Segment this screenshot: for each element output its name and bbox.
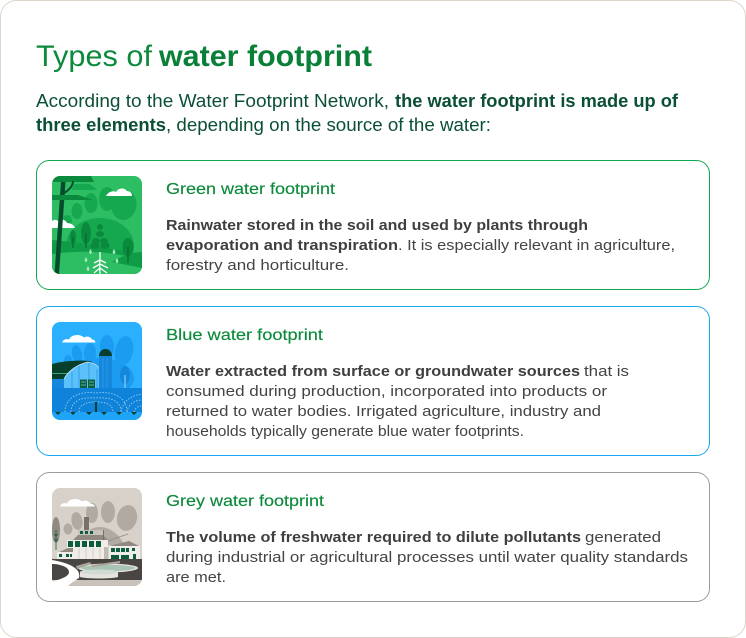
- title: water footprint: [158, 40, 372, 73]
- panel: green water footprint: [36, 160, 710, 290]
- description: . It is especially relevant in agriculture,: [398, 237, 675, 254]
- description: The volume of freshwater required to dilute pollutants: [166, 529, 581, 546]
- icon: barn and irrigation: [52, 322, 142, 420]
- description: households typically generate blue water footprints.: [166, 423, 524, 440]
- description: evaporation and transpiration: [166, 237, 398, 254]
- description: that is: [584, 363, 629, 380]
- description: consumed during production, incorporated into products or: [166, 383, 607, 400]
- intro text: three elements: [36, 115, 166, 135]
- description: during industrial or agricultural processes until water quality standards: [166, 549, 688, 566]
- icon detail: clouds: [106, 188, 132, 196]
- intro text: According to the Water Footprint Network,: [36, 91, 389, 111]
- panel: blue water footprint: [36, 306, 710, 456]
- icon detail: road: [52, 560, 79, 586]
- description: [166, 529, 688, 586]
- description: generated: [585, 529, 661, 546]
- title: Types of: [36, 40, 153, 73]
- description: returned to water bodies. Irrigated agriculture, industry and: [166, 403, 601, 420]
- description: Rainwater stored in the soil and used by plants through: [166, 217, 588, 234]
- icon detail: treatment tanks: [78, 564, 138, 572]
- icon: forest and soil: [52, 176, 142, 274]
- description: [166, 363, 629, 440]
- intro text: [36, 91, 679, 135]
- heading: Blue water footprint: [166, 327, 324, 344]
- icon detail: cloud: [60, 499, 95, 506]
- description: forestry and horticulture.: [166, 257, 349, 274]
- description: Water extracted from surface or groundwater sources: [166, 363, 580, 380]
- icon detail: cloud: [62, 335, 96, 342]
- heading: Green water footprint: [166, 181, 336, 198]
- description: are met.: [166, 569, 226, 586]
- description: [166, 217, 675, 274]
- icon: factory and treatment tanks: [52, 488, 142, 586]
- intro text: , depending on the source of the water:: [166, 115, 491, 135]
- title: [36, 40, 372, 73]
- intro text: the water footprint is made up of: [395, 91, 679, 111]
- heading: Grey water footprint: [166, 493, 325, 510]
- panel: grey water footprint: [36, 472, 710, 602]
